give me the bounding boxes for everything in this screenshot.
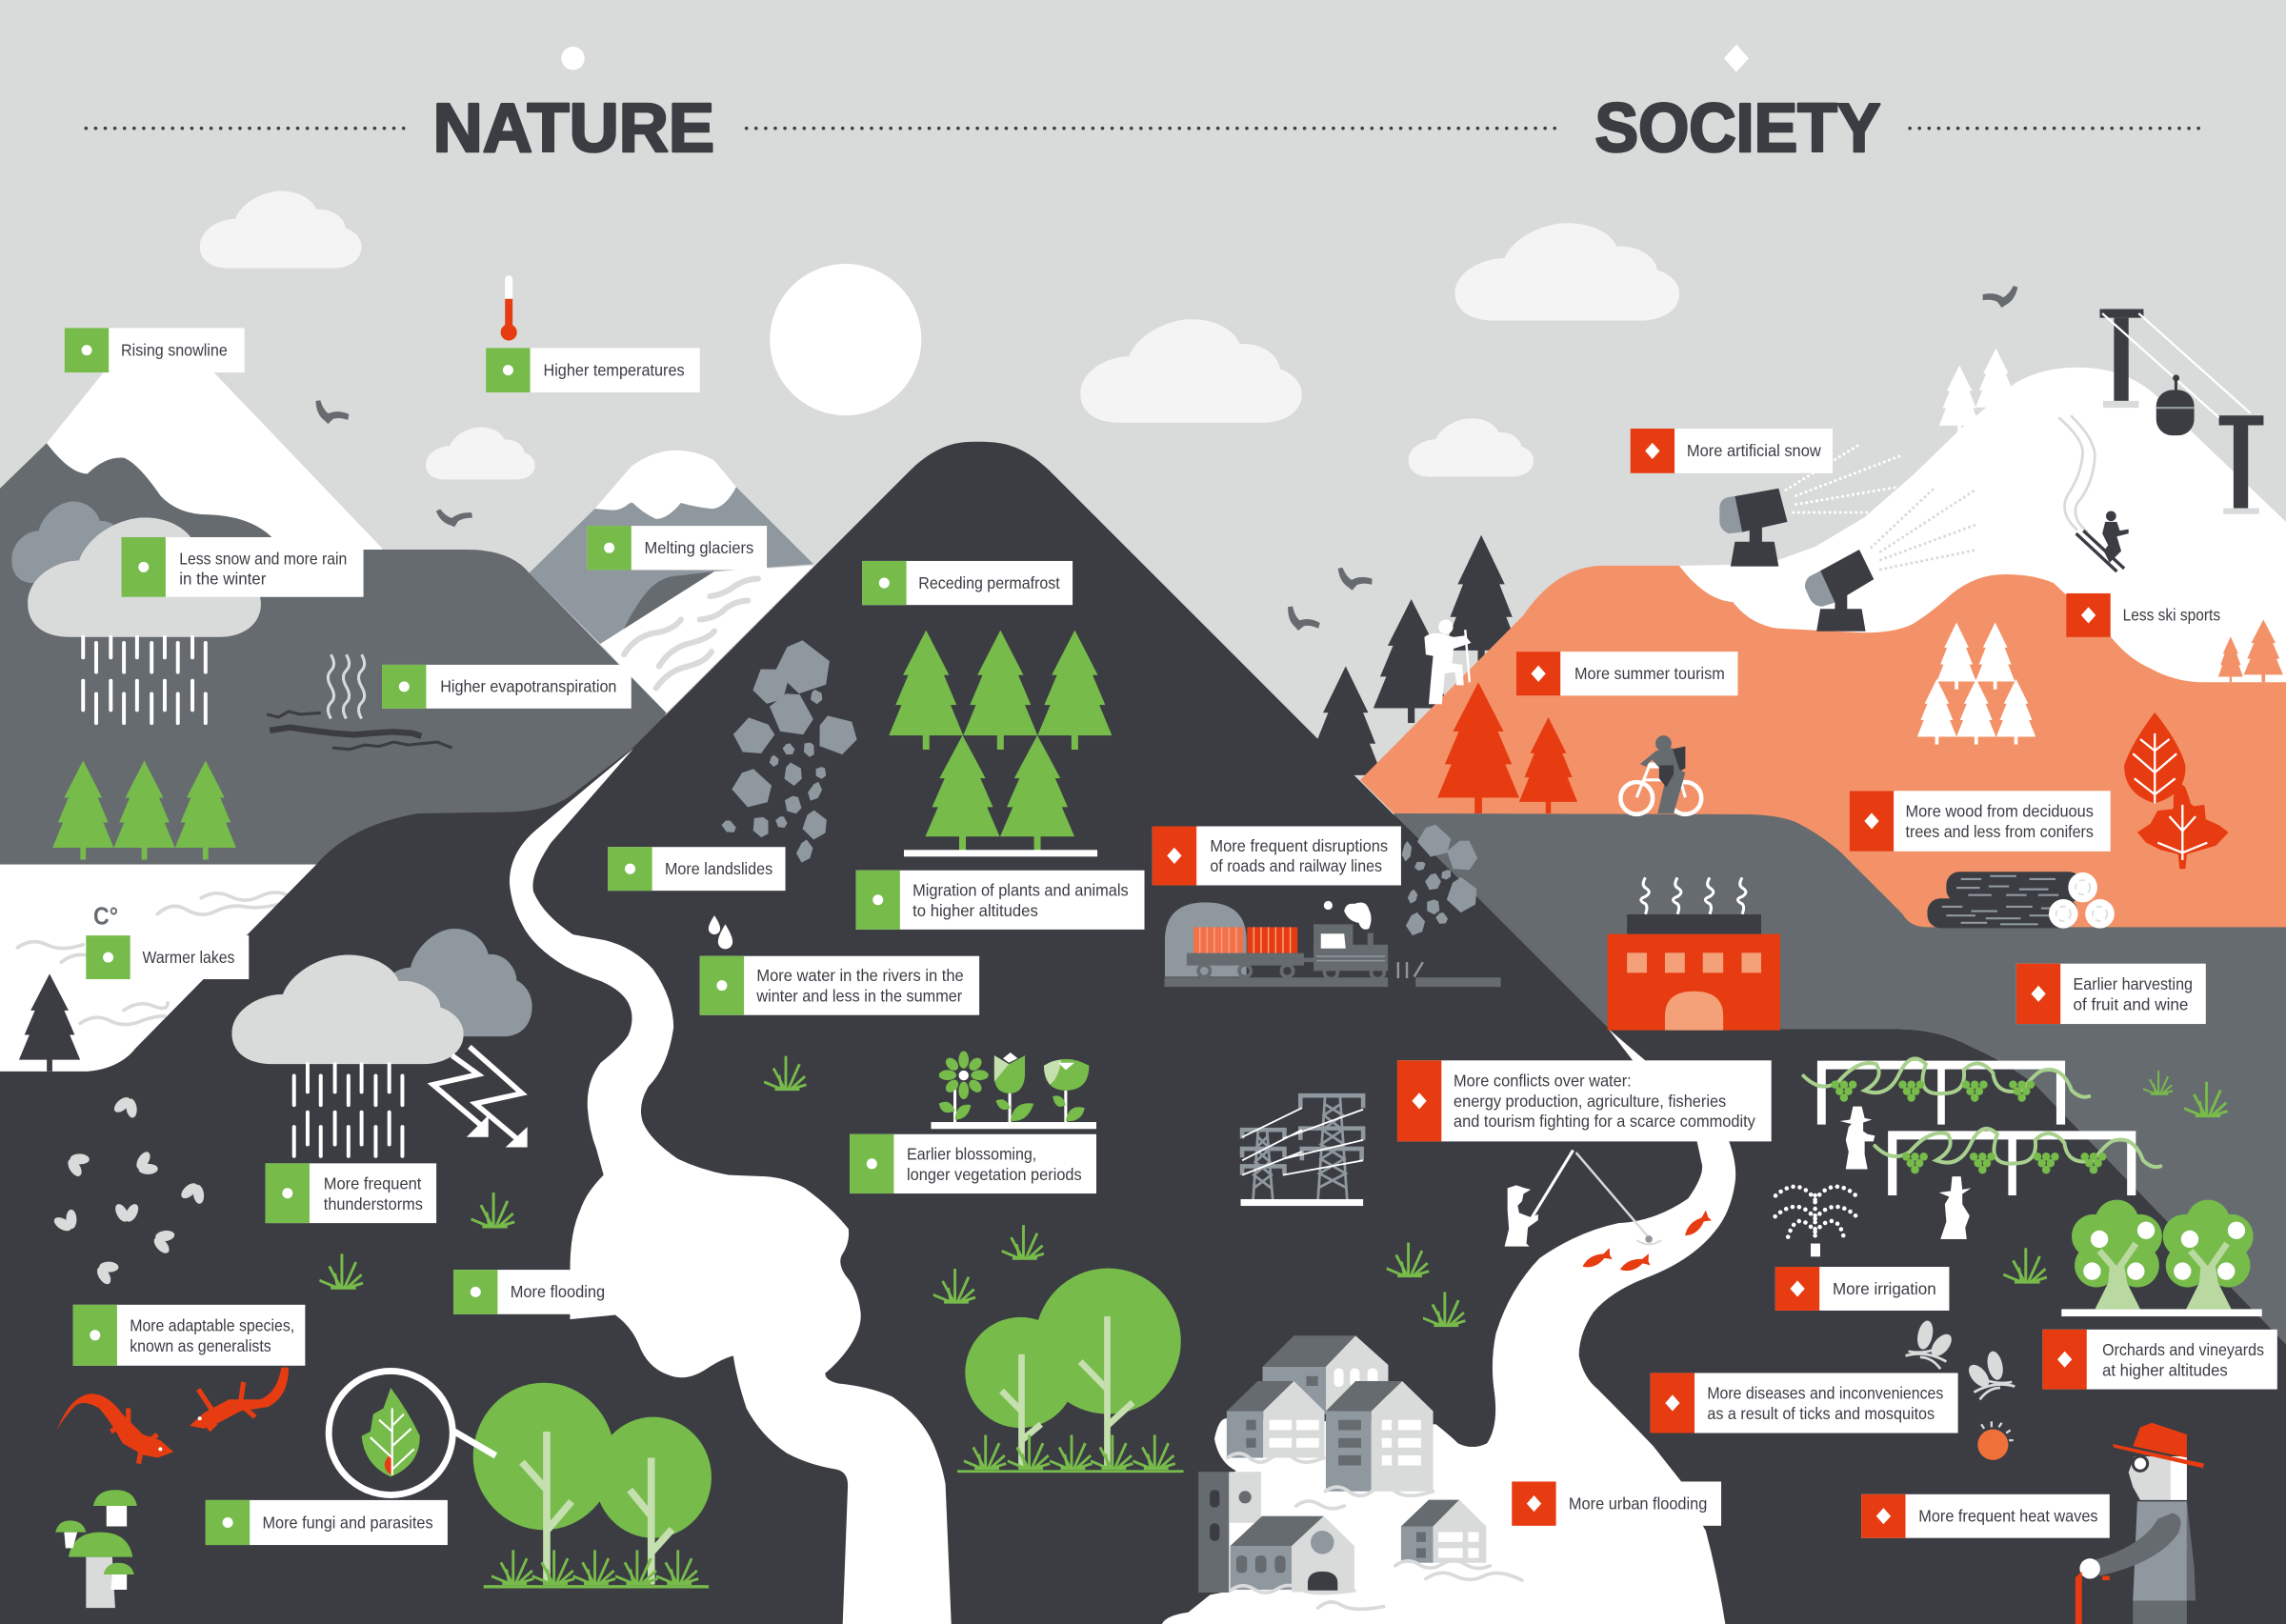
label: Orchards and vineyards: [2042, 1330, 2277, 1390]
icon: rockfall landslide: [720, 635, 859, 865]
label: Earlier harvesting: Earlier harvesting: [2074, 974, 2193, 993]
icon: orchard trees: [2061, 1200, 2262, 1316]
icon: hiker: [1424, 619, 1471, 704]
label: Earlier blossoming: Earlier blossoming,: [907, 1144, 1036, 1163]
label: More fungi and parasites: [206, 1500, 448, 1545]
label: Earlier blossoming: [850, 1134, 1096, 1193]
label: More frequent disruptions: [1153, 826, 1401, 885]
label: Higher evapotranspiration: [382, 665, 632, 709]
river: flooding stream through society: [1162, 1029, 1735, 1624]
sun: [770, 264, 921, 415]
icon: tick: [1977, 1421, 2014, 1460]
trees: white trees on slope: [1939, 349, 2016, 433]
label: More landslides: More landslides: [665, 859, 772, 878]
icon: red fish: [1580, 1211, 1713, 1272]
icon: logs: [1927, 872, 2115, 929]
label: More irrigation: [1775, 1267, 1949, 1311]
label: Rising snowline: [65, 328, 245, 372]
label: More flooding: [453, 1270, 615, 1314]
icon: white forest: [1917, 623, 2035, 745]
mountain: snowy left peak: [30, 347, 382, 612]
icon: ski lift: [2100, 309, 2263, 514]
label: More frequent thunderstorms: [266, 1163, 436, 1223]
hill: grey society valley: [1394, 813, 2286, 1344]
lake: warmer lakes: [0, 865, 316, 1072]
label: More water in the rivers: winter and less in the summer: [755, 986, 962, 1005]
icon: mosquitoes: [1906, 1319, 2015, 1399]
label: Rising snowline: Rising snowline: [121, 340, 228, 359]
icon: farmer one: [1840, 1107, 1875, 1169]
icon: fisherman: [1505, 1151, 1660, 1247]
label: Migration of plants and animals: [855, 871, 1145, 930]
label: More conflicts over water: More conflicts over water:: [1454, 1072, 1632, 1091]
label: More adaptable species: More adaptable species,: [130, 1315, 294, 1334]
label: Earlier blossoming: longer vegetation periods: [907, 1165, 1082, 1184]
label: More urban flooding: More urban flooding: [1569, 1494, 1707, 1513]
label: More landslides: [608, 847, 786, 891]
label: More frequent thunderstorms: More frequent: [324, 1173, 421, 1193]
label: More wood from deciduous: More wood from deciduous: [1906, 802, 2094, 821]
label: More summer tourism: [1516, 652, 1737, 695]
heading: nature: NATURE: [433, 90, 714, 167]
label: More conflicts over water: energy production, agriculture, fisheries: [1454, 1092, 1726, 1111]
clouds in the sky: [200, 190, 1679, 480]
label: Higher temperatures: Higher temperatures: [543, 360, 685, 379]
trees: green conifers left: [52, 760, 236, 860]
label: Earlier harvesting: of fruit and wine: [2074, 994, 2188, 1013]
icon: mushrooms: [55, 1490, 137, 1608]
hill: white ski slope: [1676, 368, 2286, 700]
icon: seeds: [50, 1092, 211, 1289]
mountain: melting glacier peak: [530, 451, 813, 712]
icon: hydro power plant: [1608, 877, 1780, 1031]
label: Migration of plants and animals: Migration of plants and animals: [912, 880, 1129, 899]
lake: warmer lakes: C°: [93, 901, 118, 930]
label: More irrigation: More irrigation: [1833, 1279, 1936, 1298]
grass tufts: [319, 1056, 2228, 1326]
label: More conflicts over water: [1397, 1060, 1772, 1141]
icon: rain cloud winter: [11, 501, 261, 723]
icon: farmer two: [1939, 1176, 1971, 1239]
label: More water in the rivers: [700, 956, 979, 1015]
icon: snow cannon upper: [1719, 489, 1788, 567]
label: More adaptable species: [73, 1305, 305, 1366]
birds: [312, 286, 2017, 635]
icon: blossoming flowers: [931, 1052, 1096, 1129]
icon: electricity pylons: [1241, 1093, 1363, 1206]
label: Less ski sports: Less ski sports: [2123, 606, 2220, 625]
label: More diseases and inconveniences: [1651, 1373, 1958, 1434]
icon: red conifers: [1437, 682, 1577, 813]
icon: train and tunnel: [1164, 901, 1501, 987]
label: More frequent disruptions: of roads and railway lines: [1210, 856, 1382, 875]
trees: broadleaf pair centre: [957, 1269, 1184, 1473]
icon: maple leaf: [2137, 780, 2229, 869]
label: More frequent heat waves: More frequent heat waves: [1918, 1507, 2098, 1526]
icon: evaporation: [267, 654, 451, 750]
label: More adaptable species: known as generalists: [130, 1336, 271, 1355]
icon: deciduous leaf: [2124, 712, 2185, 803]
label: Migration of plants and animals: to higher altitudes: [912, 901, 1038, 920]
mountain: big dark central mountain and valley: [0, 442, 2286, 1624]
label: More wood from deciduous: trees and less from conifers: [1906, 822, 2094, 841]
icon: vineyard pergolas: [1803, 1058, 2160, 1195]
icon: orange trees on the snow: [2218, 619, 2283, 682]
label: Warmer lakes: Warmer lakes: [143, 948, 235, 967]
label: More water in the rivers: More water in the rivers in the: [756, 966, 964, 985]
label: More frequent disruptions: More frequent disruptions: [1210, 836, 1388, 855]
label: Receding permafrost: [862, 561, 1073, 605]
icon: water drops: [709, 915, 732, 949]
icon: thermometer: [501, 275, 517, 341]
icon: rocks on the track: [1401, 821, 1484, 938]
label: More frequent heat waves: [1861, 1494, 2110, 1538]
icon: thunderstorm cloud: [231, 929, 532, 1156]
buildings: flooded town: [1198, 1335, 1522, 1609]
label: Orchards and vineyards: Orchards and vineyards: [2102, 1340, 2264, 1359]
label: More summer tourism: More summer tourism: [1574, 664, 1725, 683]
icon: snow spray dots on sky: [1786, 443, 1900, 512]
heading: society: SOCIETY: [1594, 90, 1880, 167]
label: More conflicts over water: and tourism fighting for a scarce commodity: [1454, 1112, 1755, 1131]
heading: society: [1594, 45, 2207, 167]
hill: grey left valley: [0, 443, 666, 865]
icon: skier: [2076, 511, 2129, 571]
trees: dark conifers behind orange hill: [1309, 535, 1519, 791]
river: flowing from the glacier through nature: [510, 749, 952, 1624]
label: Earlier harvesting: [2016, 964, 2206, 1024]
label: Higher temperatures: [486, 348, 700, 392]
label: Less ski sports: [2066, 593, 2220, 637]
label: Orchards and vineyards: at higher altitudes: [2102, 1360, 2228, 1379]
label: More flooding: More flooding: [511, 1282, 605, 1301]
icon: sprinkler: [1775, 1187, 1857, 1256]
label: More artificial snow: [1631, 429, 1833, 473]
label: Warmer lakes: [86, 935, 249, 979]
trees: migrating green conifers: [889, 631, 1112, 856]
icon: elderly man in the heat: [2075, 1423, 2204, 1624]
heading: nature: [86, 47, 714, 167]
label: More wood from deciduous: [1850, 791, 2111, 852]
label: More diseases and inconveniences: as a result of ticks and mosquitos: [1707, 1404, 1935, 1423]
label: Receding permafrost: Receding permafrost: [918, 573, 1060, 592]
icon: snow cannon lower: [1805, 550, 1874, 632]
label: Less snow and more rain: in the winter: [179, 570, 267, 589]
label: More frequent thunderstorms: thunderstorms: [324, 1194, 423, 1213]
icon: cyclist: [1620, 735, 1701, 814]
label: Melting glaciers: [587, 526, 767, 570]
dark tree on lake: [19, 973, 80, 1072]
trees: broadleaf pair lower left: [473, 1383, 712, 1589]
icon: lizards: [57, 1368, 289, 1464]
icon: lightning arrows: [433, 1047, 528, 1148]
label: Melting glaciers: Melting glaciers: [645, 538, 754, 557]
icon: ski tracks: [2058, 415, 2095, 532]
label: Higher evapotranspiration: Higher evapotranspiration: [440, 677, 616, 696]
label: More artificial snow: More artificial snow: [1687, 441, 1821, 460]
icon: snow spray dots on slope: [1872, 488, 1978, 570]
hill: orange summer slope: [1360, 566, 2286, 933]
label: Less snow and more rain: Less snow and more rain: [179, 549, 347, 568]
label: More fungi and parasites: More fungi and parasites: [263, 1513, 433, 1532]
icon: magnifier with infected leaf: [329, 1371, 495, 1495]
label: More urban flooding: [1512, 1481, 1721, 1526]
label: More diseases and inconveniences: More diseases and inconveniences: [1707, 1384, 1944, 1403]
label: Less snow and more rain: [122, 537, 364, 597]
